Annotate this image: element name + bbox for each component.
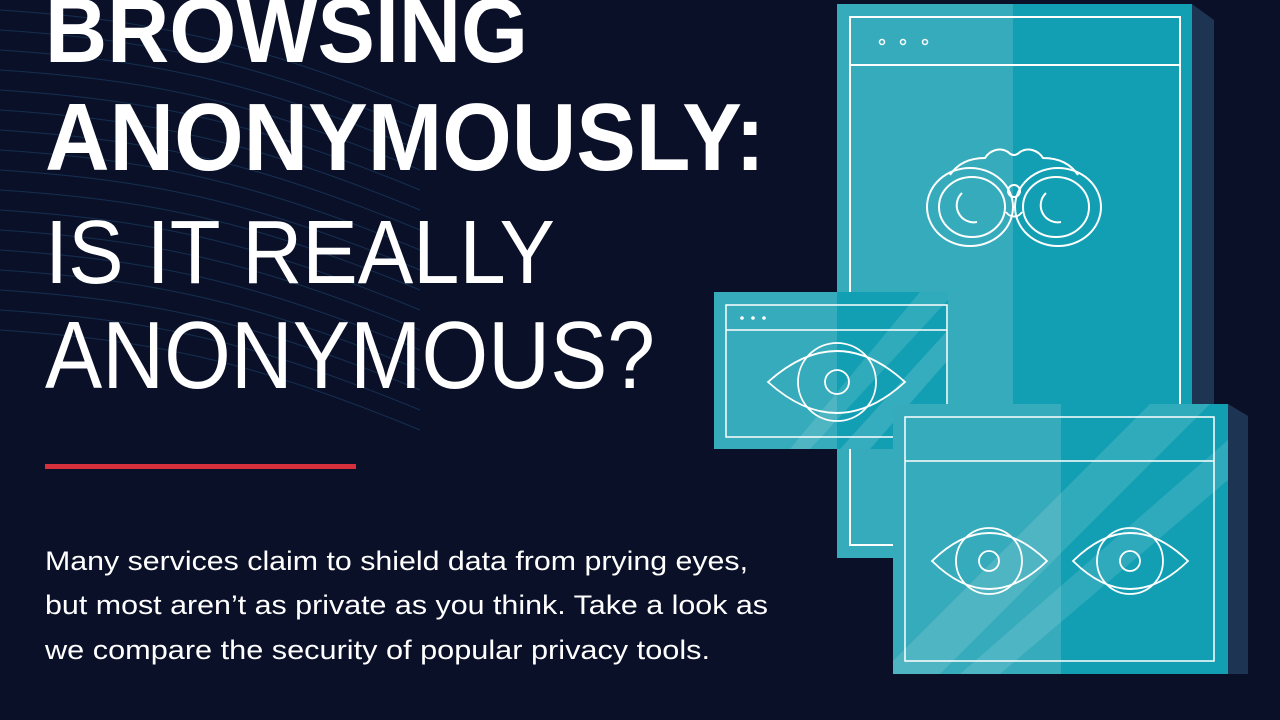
illustration: bottom browser with two eyes [880,404,1248,674]
intro paragraph [44,546,768,665]
title [45,0,765,409]
icon: left eye [932,528,1047,594]
intro paragraph: but most aren’t as private as you think. Take a look as [45,590,768,620]
icon: eye [768,343,905,421]
title: ANONYMOUS? [45,302,655,409]
illustration: big browser with binoculars [837,4,1214,558]
icon: right eye [1073,528,1188,594]
title: ANONYMOUSLY: [45,84,765,191]
red divider [45,464,356,469]
icon: binoculars [927,150,1101,246]
title: IS IT REALLY [45,203,555,303]
intro paragraph: we compare the security of popular privacy tools. [44,635,710,665]
intro paragraph: Many services claim to shield data from prying eyes, [45,546,748,576]
illustration: small browser with eye [714,292,948,449]
